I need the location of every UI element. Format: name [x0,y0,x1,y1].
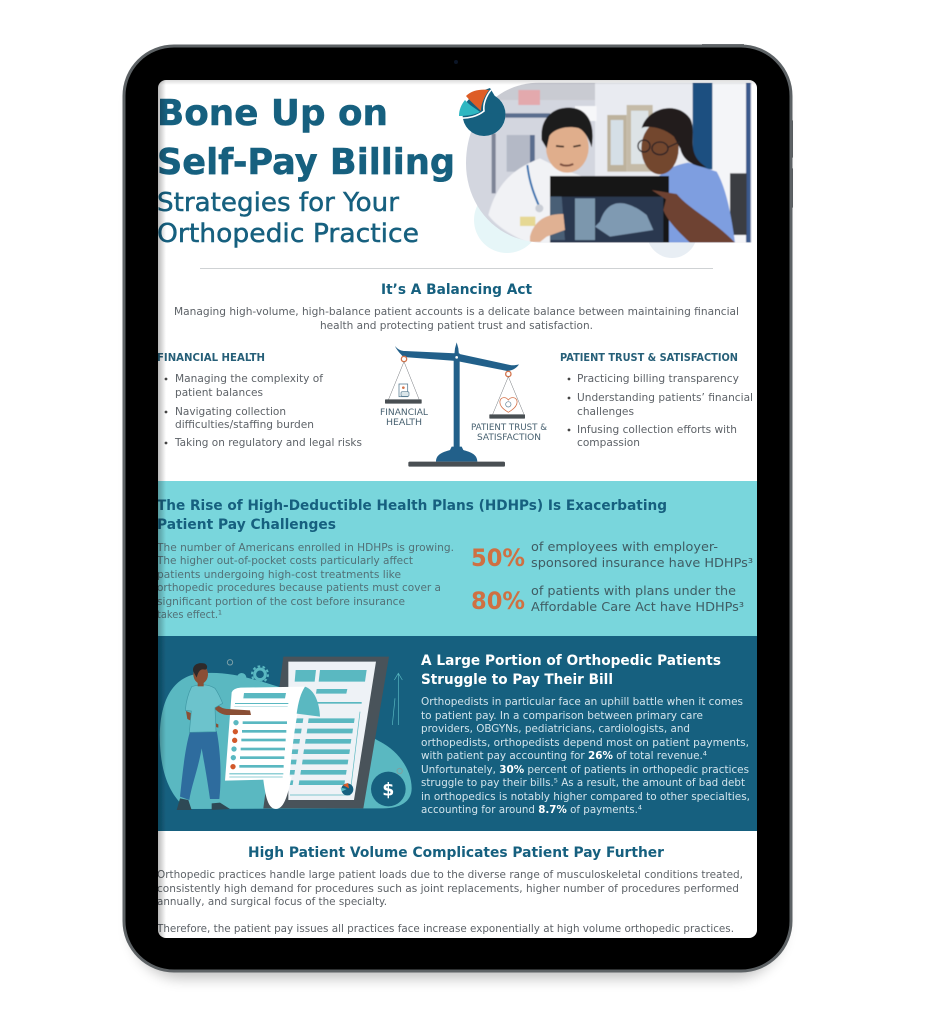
title: Self-Pay Billing [157,142,455,183]
stat: 50%: 50% [471,544,525,572]
panel: large portion dark band [158,636,757,831]
logo mark [458,88,506,136]
panel: financial health list: patient balances [175,387,263,399]
panel: patient trust list: compassion [577,437,640,449]
title [157,93,455,183]
illustration: man holding bill beside tablet [160,657,412,810]
panel: patient trust list [560,352,753,449]
HDHP body text: takes effect.¹ [157,609,222,621]
intro paragraph: health and protecting patient trust and satisfaction. [320,320,593,332]
panel: financial health list: difficulties/staffing burden [175,419,314,431]
orthopedic body text: orthopedists, orthopedists depend most on patient payments, [421,737,749,749]
heading: rise of HDHPs: The Rise of High-Deductible Health Plans (HDHPs) Is Exacerbating [157,498,667,514]
icon: balance scale: FINANCIAL [380,408,428,418]
heading: rise of HDHPs: Patient Pay Challenges [157,517,336,533]
heading: large portion: A Large Portion of Orthopedic Patients [421,653,721,669]
orthopedic body text: accounting for around 8.7% of payments.⁴ [421,804,642,816]
high patient volume body text: Orthopedic practices handle large patient loads due to the diverse range of musculoskeletal conditions treated, [157,869,743,881]
orthopedic body text: with patient pay accounting for 26% of total revenue.⁴ [421,750,707,762]
icon: balance scale: PATIENT TRUST & [471,423,547,433]
orthopedic body text: to patient pay. In a comparison between primary care [421,710,703,722]
icon: balance scale: HEALTH [386,418,422,428]
HDHP body text [156,542,454,621]
photo: doctor and nurse reviewing x-ray [463,80,757,247]
orthopedic body text: in orthopedics is notably higher compared to other specialties, [421,791,750,803]
panel: financial health list: FINANCIAL HEALTH [157,352,265,364]
title: Bone Up on [157,93,388,134]
icon: balance scale [380,342,547,467]
tablet device frame [123,44,793,978]
orthopedic body text: struggle to pay their bills.⁵ As a result, the amount of bad debt [421,777,745,789]
high patient volume body text [156,869,743,935]
stat: 80%: Affordable Care Act have HDHPs³ [531,599,744,614]
orthopedic body text: providers, OBGYNs, pediatricians, cardiologists, and [421,723,690,735]
heading: large portion: Struggle to Pay Their Bill [421,672,613,688]
orthopedic body text: Orthopedists in particular face an uphill battle when it comes [421,696,743,708]
stat: 80%: of patients with plans under the [531,583,736,598]
panel: financial health list: Taking on regulatory and legal risks [174,437,362,449]
stat: 80%: 80% [471,587,525,615]
subtitle: Strategies for Your [157,188,399,218]
orthopedic body text [421,696,750,816]
panel: financial health list: Navigating collection [175,406,286,418]
HDHP body text: patients undergoing high-cost treatments like [157,569,401,581]
orthopedic body text: Unfortunately, 30% percent of patients in orthopedic practices [421,764,749,776]
heading: large portion [421,653,721,688]
stat: 50%: sponsored insurance have HDHPs³ [531,555,753,570]
high patient volume body text: annually, and surgical focus of the specialty. [157,896,387,908]
panel: patient trust list: challenges [577,406,634,418]
panel: patient trust list: Infusing collection efforts with [577,424,737,436]
decorative pale circles behind photo [474,206,695,258]
intro paragraph [174,306,739,332]
high patient volume body text: Therefore, the patient pay issues all practices face increase exponentially at high volume orthopedic practices. [156,923,734,935]
subtitle: Orthopedic Practice [157,219,419,249]
intro paragraph: Managing high-volume, high-balance patient accounts is a delicate balance between maintaining financial [174,306,739,318]
high patient volume body text: consistently high demand for procedures such as joint replacements, higher number of procedures performed [157,883,739,895]
stat: 80% [472,586,744,611]
icon: balance scale: SATISFACTION [477,433,541,443]
panel: patient trust list: PATIENT TRUST & SATISFACTION [560,352,738,364]
screen [156,80,757,938]
panel: HDHP teal band [156,481,757,637]
stat: 50%: of employees with employer- [531,539,718,554]
HDHP body text: orthopedic procedures because patients must cover a [157,582,441,594]
HDHP body text: The higher out-of-pocket costs particularly affect [156,555,413,567]
panel: financial health list [157,352,362,449]
heading: It's A Balancing Act: It’s A Balancing Act [381,282,532,298]
illustration: man holding bill beside tablet: $ [382,781,394,801]
stat: 50% [472,542,752,570]
panel: patient trust list: Understanding patients’ financial [577,392,753,404]
panel: financial health list: Managing the complexity of [175,373,323,385]
heading: high patient volume: High Patient Volume Complicates Patient Pay Further [248,845,665,861]
heading: rise of HDHPs [157,498,667,533]
panel: patient trust list: Practicing billing transparency [577,373,739,385]
subtitle [157,188,419,249]
HDHP body text: The number of Americans enrolled in HDHPs is growing. [156,542,454,554]
HDHP body text: significant portion of the cost before insurance [157,596,405,608]
